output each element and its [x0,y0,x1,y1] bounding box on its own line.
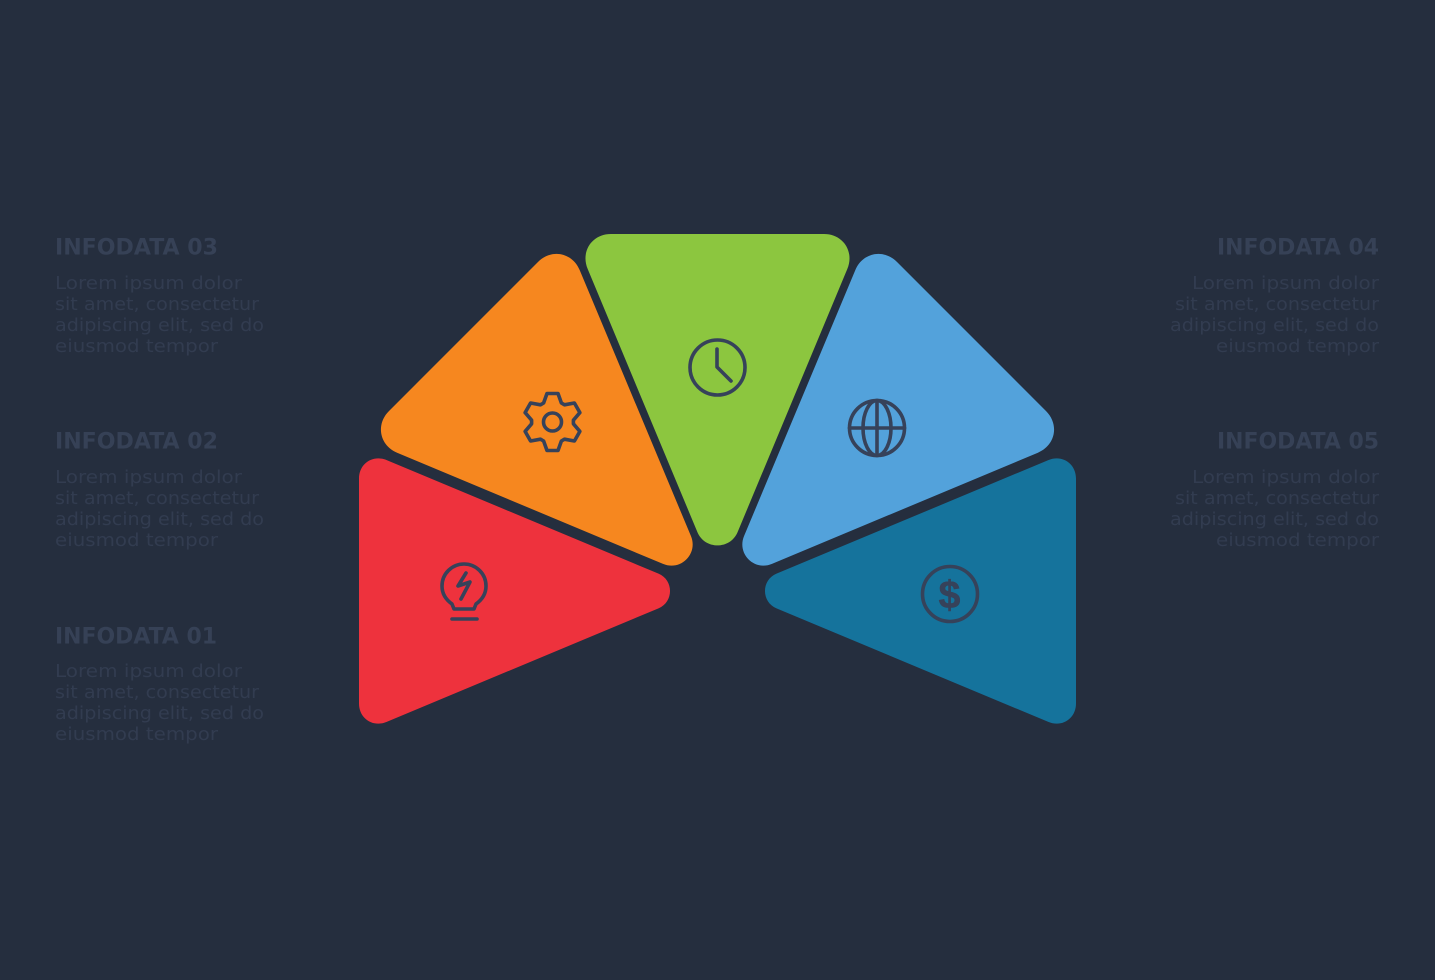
text block: infodata 03: INFODATA 03 [55,236,218,260]
text block: infodata 01: Lorem ipsum dolor [55,661,243,682]
text block: infodata 04: INFODATA 04 [1217,236,1379,260]
text block: infodata 01: sit amet, consectetur [55,682,260,703]
text block: infodata 04: Lorem ipsum dolor [1192,273,1380,294]
text block: infodata 05: adipiscing elit, sed do [1170,509,1379,530]
text block: infodata 04: eiusmod tempor [1216,336,1380,357]
text block: infodata 03: adipiscing elit, sed do [55,315,264,336]
text block: infodata 03: eiusmod tempor [55,336,219,357]
text block: infodata 01 [55,624,264,745]
panel: segment 05 dark blue [765,458,1076,724]
text block: infodata 05: eiusmod tempor [1216,530,1380,551]
icon: gear [525,394,580,450]
text block: infodata 03 [55,236,264,357]
text block: infodata 02 [55,430,264,551]
text block: infodata 05: sit amet, consectetur [1175,488,1380,509]
icon: dollar coin: $ [939,574,961,617]
text block: infodata 05: INFODATA 05 [1217,430,1379,454]
text block: infodata 04: adipiscing elit, sed do [1170,315,1379,336]
panel: segment 04 light blue [742,254,1054,566]
icon: dollar coin [922,566,978,622]
text block: infodata 02: sit amet, consectetur [55,488,260,509]
text block: infodata 02: INFODATA 02 [55,430,218,454]
text block: infodata 05 [1170,430,1380,551]
text block: infodata 05: Lorem ipsum dolor [1192,467,1380,488]
text block: infodata 02: eiusmod tempor [55,530,219,551]
icon: clock [690,340,745,395]
text block: infodata 04: sit amet, consectetur [1175,294,1380,315]
icon: light bulb [442,564,486,619]
panel: segment 02 orange [381,254,693,566]
text block: infodata 03: sit amet, consectetur [55,294,260,315]
text block: infodata 04 [1170,236,1380,357]
text block: infodata 02: Lorem ipsum dolor [55,467,243,488]
panel: segment 01 red [359,458,670,724]
text block: infodata 01: eiusmod tempor [55,724,219,745]
text block: infodata 03: Lorem ipsum dolor [55,273,243,294]
icon: globe [850,400,904,456]
text block: infodata 02: adipiscing elit, sed do [55,509,264,530]
panel: segment 03 green [585,234,850,545]
text block: infodata 01: INFODATA 01 [55,624,217,650]
text block: infodata 01: adipiscing elit, sed do [55,703,264,724]
